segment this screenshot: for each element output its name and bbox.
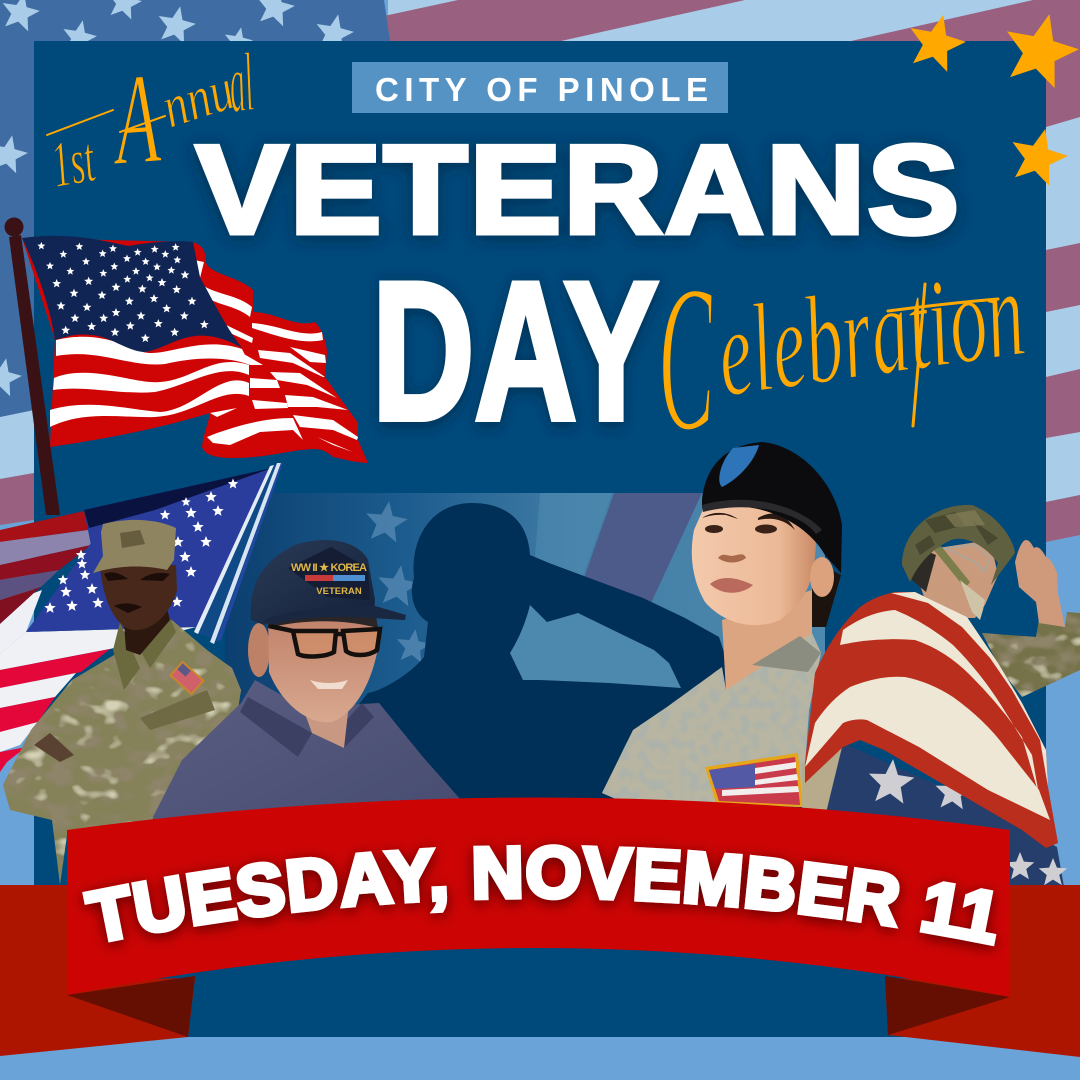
flagpole xyxy=(4,218,60,515)
ribbon with date: TUESDAY, NOVEMBER 11 xyxy=(75,838,1004,957)
flag: red body xyxy=(22,238,368,463)
flag wrap: cream stripes xyxy=(891,592,1048,787)
saluting man: blue flag lower xyxy=(826,743,1064,890)
script text: 1st Annual: nnu xyxy=(154,55,242,141)
woman: face xyxy=(692,500,816,625)
badge: City of Pinole: CITY OF PINOLE xyxy=(375,71,708,108)
saluting man: hand xyxy=(1015,540,1065,627)
script text: 1st Annual: 1st xyxy=(46,123,101,202)
script text: Celebration: C xyxy=(653,240,719,476)
woman: hair xyxy=(812,560,841,627)
saluting man: beige jacket xyxy=(802,745,845,815)
veteran: collar xyxy=(240,697,374,757)
left fold xyxy=(67,976,195,1037)
veteran: cap bill xyxy=(264,606,406,625)
badge: City of Pinole xyxy=(352,62,728,113)
script text: Celebration: elebration xyxy=(708,242,1032,424)
woman: beret xyxy=(702,442,842,573)
silhouette: saluting soldier xyxy=(359,503,726,798)
script text: Celebration xyxy=(653,240,1032,476)
woman: features xyxy=(702,513,795,530)
soldier: neck xyxy=(122,600,170,655)
photo flag behind soldier xyxy=(0,462,283,772)
veteran: ear xyxy=(248,623,270,677)
soldier: collar xyxy=(113,618,176,690)
woman: uniform xyxy=(602,633,821,807)
flag: upper stripes xyxy=(0,511,88,542)
woman: ear xyxy=(810,557,834,597)
woman: beret flash xyxy=(719,445,759,487)
female soldier in beret xyxy=(602,442,842,807)
soldier: uniform xyxy=(3,620,241,885)
veteran: cap patch xyxy=(288,547,370,600)
ribbon tails xyxy=(0,885,1080,1057)
flag: canton xyxy=(26,468,272,632)
salute photo panel xyxy=(225,493,825,803)
veteran: cap patch: WW II ★ KOREA xyxy=(291,562,367,574)
soldier: face xyxy=(100,565,177,630)
soldier: hands xyxy=(34,733,74,762)
heading: DAY: DAY xyxy=(372,242,658,461)
right fold xyxy=(885,976,1010,1035)
flag: navy canton xyxy=(22,236,242,352)
saluting man: face and neck xyxy=(915,540,998,618)
flag: poles xyxy=(196,462,282,640)
script text: 1st Annual: A xyxy=(106,46,164,193)
flag: white stripes xyxy=(50,260,358,452)
veteran: glasses xyxy=(269,626,380,656)
veteran: shirt xyxy=(153,680,462,830)
heading: VETERANS: VETERANS xyxy=(196,119,961,260)
left tail xyxy=(0,885,195,1056)
woman: neck xyxy=(722,590,812,692)
veteran: cap crown xyxy=(251,540,375,625)
flag: stars xyxy=(44,478,238,613)
soldier: shoulder flag patch xyxy=(169,661,205,695)
veteran: mouth xyxy=(310,680,348,689)
veteran man with cap xyxy=(153,540,462,830)
saluting man: glasses xyxy=(945,545,990,572)
decorative orange stars xyxy=(902,5,1080,188)
veteran: neck xyxy=(300,695,350,748)
soldier saluting, wrapped in flag xyxy=(802,505,1080,890)
waving American flag xyxy=(22,236,368,463)
veteran: face xyxy=(268,610,379,722)
saluting man: helmet xyxy=(902,505,1015,585)
soldier: cap xyxy=(93,520,176,573)
flag: stars xyxy=(37,242,209,342)
soldier: pocket shading xyxy=(140,690,215,730)
soldier in camouflage xyxy=(3,520,241,885)
woman: flag patch xyxy=(705,753,803,807)
saluting man: flag wrap xyxy=(805,592,1058,848)
script text: 1st Annual: al xyxy=(224,36,258,130)
ribbon with date xyxy=(67,798,1010,997)
saluting man: chin strap xyxy=(934,546,970,588)
flag: lower stripes xyxy=(0,627,196,670)
saluting man: arm xyxy=(982,612,1080,697)
right tail xyxy=(885,885,1080,1057)
veteran: cap patch: VETERAN xyxy=(316,586,362,597)
script text: 1st Annual xyxy=(46,36,258,202)
